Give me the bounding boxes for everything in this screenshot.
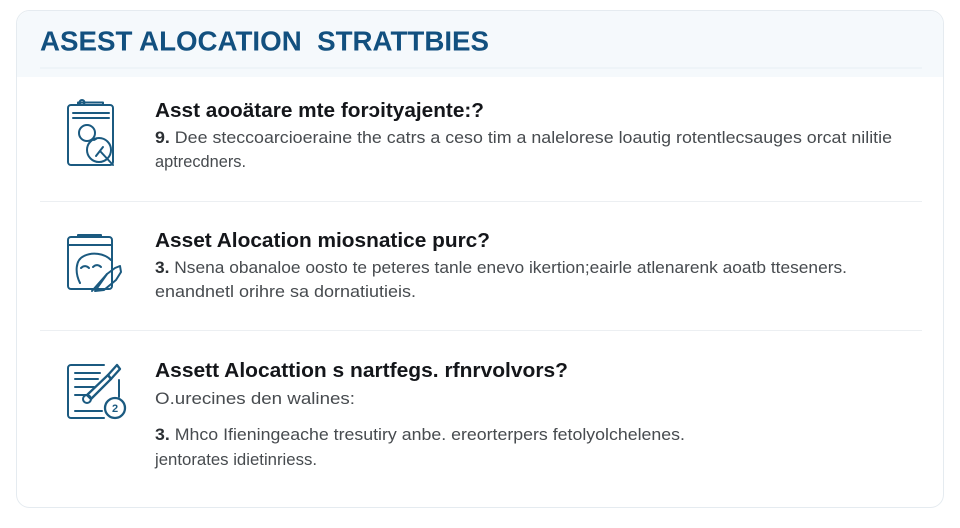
section 1 text: 9. Dee steccoarcioeraine the catrs a ceso tim a nalelorese loautig rotentlecsauges orcat nilitie	[155, 129, 892, 147]
icon: notepad with face and pen	[68, 235, 121, 291]
section 3 text: 3. Mhco Ifieningeache tresutiry anbe. ereorterpers fetolyolchelenes.	[155, 426, 685, 444]
section 1 text: aptrecdners.	[155, 153, 246, 171]
icon: clipboard with magnifier	[68, 100, 113, 165]
title: ASEST ALOCATION STRATTBIES	[40, 26, 489, 56]
section 1 heading: Asst aooätare mte forɔityajente:?	[155, 100, 484, 122]
icon: document with brush and badge	[68, 365, 125, 418]
section 2 text: enandnetl orihre sa dornatiutieis.	[155, 283, 416, 301]
section 2 heading: Asset Alocation miosnatice purc?	[155, 230, 490, 252]
section 3 text: O.urecines den walines:	[155, 390, 355, 408]
icon: document with brush and badge: 2	[112, 403, 118, 415]
section 3 text	[154, 390, 685, 469]
section 2 text: 3. Nsena obanaloe oosto te peteres tanle enevo ikertion;eairle atlenarenk aoatb tteseners.	[155, 259, 847, 277]
section 3 heading: Assett Alocattion s nartfegs. rfnrvolvors?	[155, 360, 568, 382]
section 2 text	[155, 259, 847, 301]
section 1 text	[155, 129, 892, 171]
section 3 text: jentorates idietinriess.	[154, 451, 317, 469]
